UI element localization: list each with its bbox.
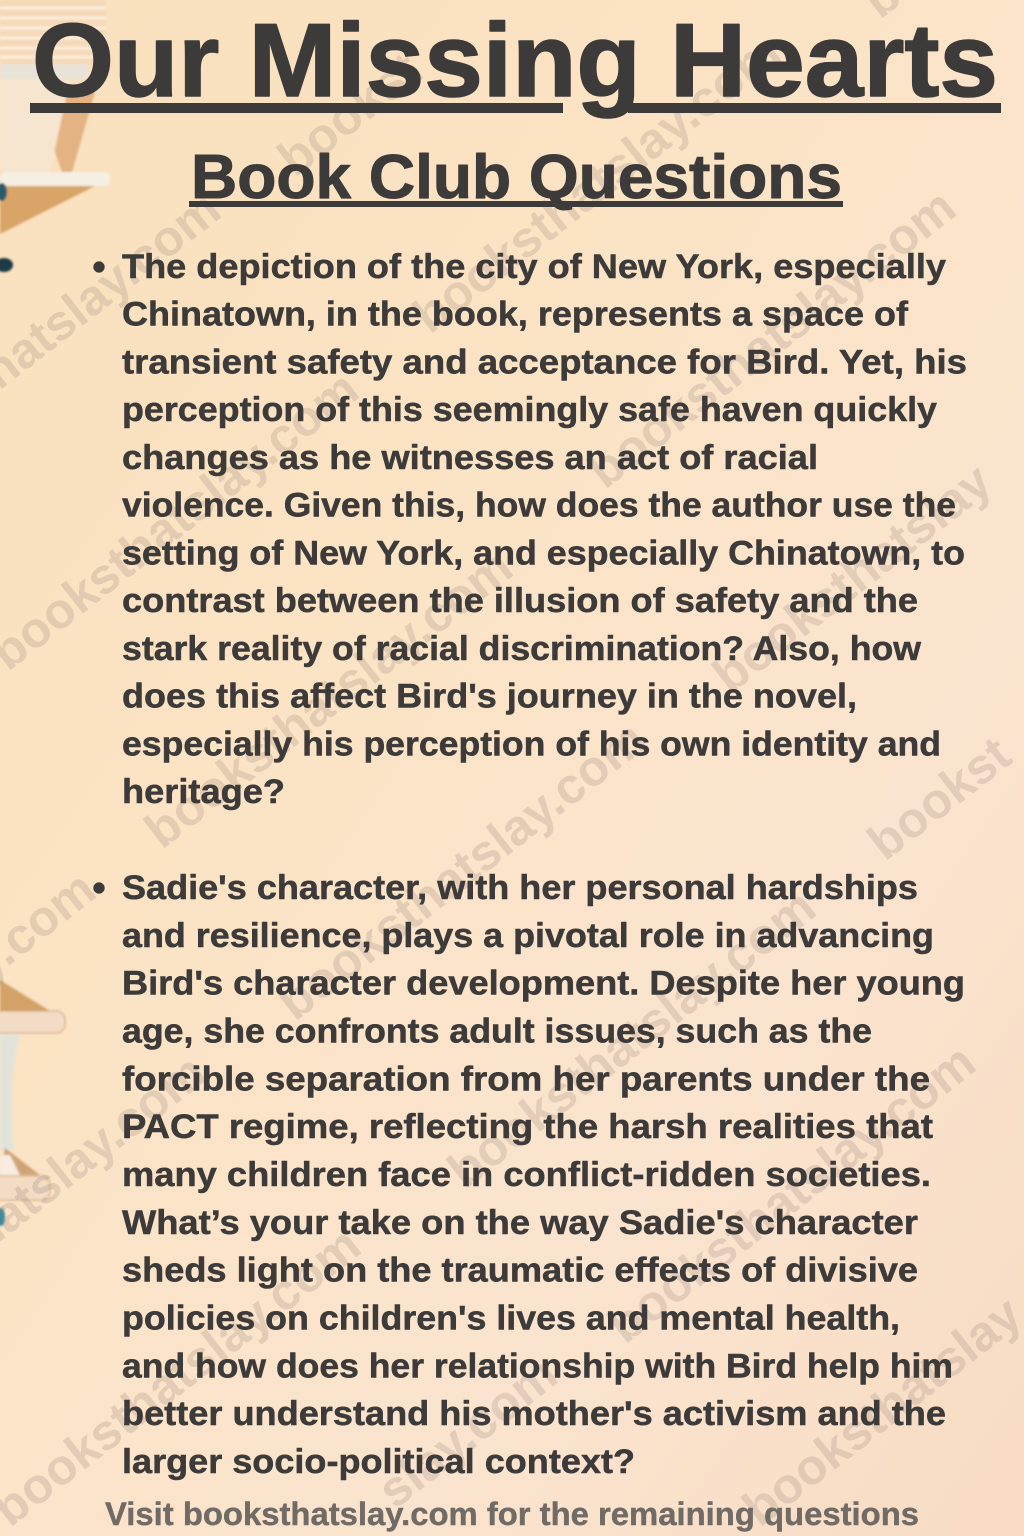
- watermarks: booksthatslay: [732, 1285, 1024, 1536]
- watermarks: booksthatslay.com: [134, 538, 523, 859]
- question 1: [94, 248, 967, 811]
- decoration: top book stack: [0, 0, 110, 272]
- title: Our Missing Hearts: [32, 3, 998, 119]
- watermarks: slay.com: [367, 1345, 568, 1519]
- question 1: setting of New York, and especially Chinatown, to: [122, 534, 965, 572]
- question 1: contrast between the illusion of safety and the: [122, 582, 918, 620]
- question 2: policies on children's lives and mental health,: [122, 1300, 900, 1338]
- question 2: many children face in conflict-ridden societies.: [122, 1156, 931, 1194]
- watermarks: booksthatslay.com: [267, 710, 656, 1031]
- question 2: PACT regime, reflecting the harsh realities that: [122, 1108, 933, 1146]
- question 2: Bird's character development. Despite her young: [122, 965, 965, 1003]
- footer call to action: Visit booksthatslay.com for the remaining questions: [105, 1496, 919, 1532]
- question 1: The depiction of the city of New York, especially: [122, 248, 946, 286]
- question 2: better understand his mother's activism and the: [122, 1395, 946, 1433]
- question 2: forcible separation from her parents under the: [122, 1060, 930, 1098]
- question 2: age, she confronts adult issues, such as the: [122, 1012, 872, 1050]
- question 1: perception of this seemingly safe haven quickly: [122, 391, 937, 429]
- watermarks: booksthatslay.com: [402, 23, 791, 344]
- watermarks: booksthatslay.com: [577, 178, 966, 499]
- question 1: transient safety and acceptance for Bird. Yet, his: [122, 344, 967, 382]
- question 1: especially his perception of his own identity and: [122, 726, 941, 764]
- question 2: [94, 869, 965, 1481]
- question 2: sheds light on the traumatic effects of divisive: [122, 1252, 918, 1290]
- watermarks: booksthatslay: [702, 452, 1002, 704]
- question 1: violence. Given this, how does the author use the: [122, 487, 956, 525]
- question 1: does this affect Bird's journey in the novel,: [122, 678, 857, 716]
- subtitle: Book Club Questions: [191, 143, 842, 212]
- question 2: What’s your take on the way Sadie's character: [122, 1204, 918, 1242]
- question 1: heritage?: [122, 773, 285, 811]
- watermarks: booksthatslay.com: [597, 1033, 986, 1354]
- question 2: and how does her relationship with Bird help him: [122, 1347, 953, 1385]
- question 1: changes as he witnesses an act of racial: [122, 439, 818, 477]
- watermarks: bookst: [857, 725, 1021, 871]
- question 2: Sadie's character, with her personal hardships: [122, 869, 918, 907]
- question 2: and resilience, plays a pivotal role in advancing: [122, 917, 934, 955]
- question 1: Chinatown, in the book, represents a space of: [122, 296, 909, 334]
- watermarks: bookst: [267, 41, 431, 187]
- question 2: larger socio-political context?: [122, 1443, 635, 1481]
- question 1: stark reality of racial discrimination? Also, how: [122, 630, 922, 668]
- decoration: lower book stack: [0, 980, 65, 1226]
- watermarks: booksthatslay.com: [437, 878, 826, 1199]
